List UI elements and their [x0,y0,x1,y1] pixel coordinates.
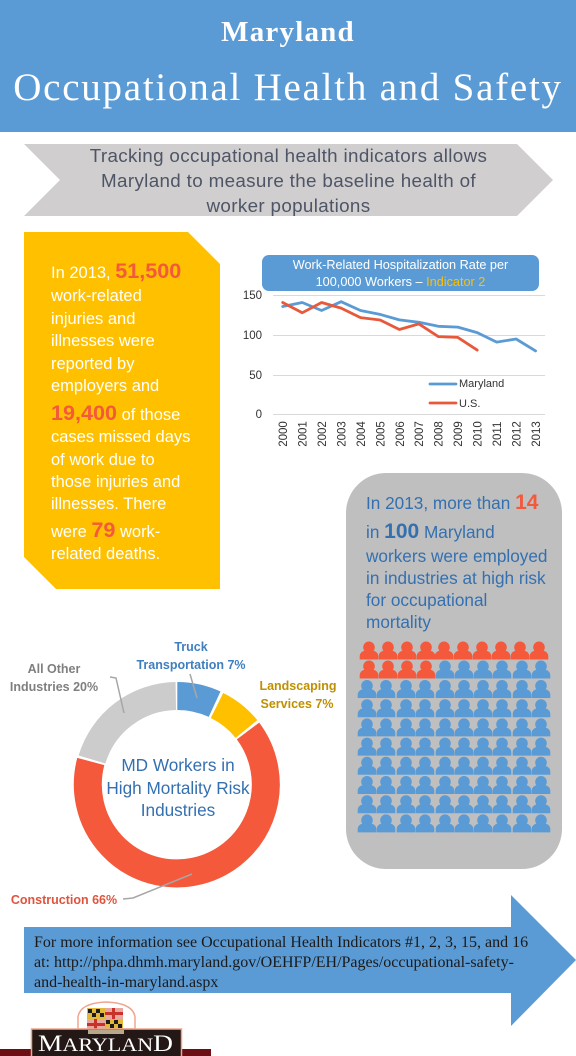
intro text: Tracking occupational health indicators allows [90,145,487,166]
x axis labels: 2003 [336,421,348,447]
y axis labels: 100 [243,330,262,342]
donut centre label [106,755,250,820]
x axis labels: 2011 [492,422,504,446]
x axis labels: 2008 [434,421,446,447]
donut chart: industries [10,640,337,907]
donut centre label: High Mortality Risk [106,778,250,798]
Maryland flag [87,1008,123,1030]
statistics text: illnesses. There [51,495,166,513]
label: truck transportation: Transportation 7% [136,658,246,672]
x axis labels: 2000 [278,421,290,447]
header band [0,0,576,132]
high-risk text: workers were employed [366,546,548,566]
x axis labels: 2009 [453,421,465,447]
label: landscaping services: Services 7% [261,697,333,711]
intro chevron banner [24,144,553,216]
legend: Maryland [459,378,504,390]
intro text: Maryland to measure the baseline health of [101,170,476,191]
statistics text: injuries and [51,310,135,328]
blue figures [358,660,550,832]
label: all other industries: All Other [28,662,81,676]
intro text: worker populations [207,195,370,216]
label: truck transportation [136,640,246,672]
logo wordmark: MARYLAN D [38,1031,173,1056]
label: landscaping services: Landscaping [259,679,337,693]
y axis labels: 150 [243,290,262,302]
segment: landscaping services [217,706,246,729]
x axis labels: 2002 [317,421,329,447]
red figures [360,642,548,678]
more information text [34,934,528,991]
statistics text: those injuries and [51,473,180,491]
chart title box: Work-Related Hospitalization Rate per [293,258,508,272]
statistics text: employers and [51,377,159,395]
statistics text: work-related [51,287,142,305]
statistics text: illnesses were [51,332,155,350]
x axis labels: 2007 [414,421,426,447]
footer arrow [24,895,576,1026]
x axis labels [278,421,543,447]
x axis labels: 2012 [512,421,524,447]
x axis labels: 2010 [473,421,485,447]
chart title box: 100,000 Workers – Indicator 2 [316,275,485,289]
chart title box [262,255,539,291]
intro text [90,145,487,216]
donut centre label: MD Workers in [121,755,235,775]
donut centre label: Industries [141,800,215,820]
statistics text: reported by [51,355,134,373]
high-risk text: In 2013, more than 14 [366,491,538,514]
footer arrow: For more information see Occupational Health Indicators #1, 2, 3, 15, and 16 [34,934,528,951]
panel: high-risk workers [346,473,562,869]
label: all other industries [10,662,98,694]
label: truck transportation: Truck [174,640,208,654]
x axis labels: 2005 [375,421,387,447]
high-risk text: mortality [366,612,431,632]
segment: truck transportation [177,696,215,704]
y axis labels [243,290,262,421]
y axis labels: 0 [256,409,262,421]
statistics text: were 79 work- [51,517,160,542]
legend [430,378,504,410]
x axis labels: 2006 [395,421,407,447]
high-risk text: in industries at high risk [366,568,546,588]
statistics text: related deaths. [51,545,160,563]
statistics text: 19,400 of those [51,400,180,425]
U.S. series line [283,302,477,350]
line chart: hospitalization rate [243,290,545,447]
statistics text: cases missed days [51,428,190,446]
statistics text: In 2013, 51,500 [51,258,181,283]
segment: construction [88,731,266,873]
x axis labels: 2004 [356,421,368,447]
label: landscaping services [259,679,337,711]
x axis labels: 2001 [298,421,310,447]
label: all other industries: Industries 20% [10,680,98,694]
Maryland series line [283,302,536,351]
logo: Maryland [0,1001,211,1056]
high-risk text: in 100 Maryland [366,520,495,543]
leader lines [110,674,197,899]
statistics text: of work due to [51,451,155,469]
y axis labels: 50 [249,370,262,382]
statistics text [51,258,190,563]
panel: 2013 injury statistics [24,232,220,589]
x axis labels: 2013 [531,421,543,447]
title: Maryland: Maryland [221,16,355,48]
pictogram: 14 of 100 workers [358,642,550,832]
high-risk text [366,491,548,632]
footer arrow: and-health-in-maryland.aspx [34,974,218,991]
label: construction: Construction 66% [11,893,117,907]
title: Occupational Health and Safety: Occupational Health and Safety [13,66,563,109]
footer arrow: at: http://phpa.dhmh.maryland.gov/OEHFP/EH/Pages/occupational-safety- [34,954,514,971]
segment: all other industries [92,696,176,760]
high-risk text: for occupational [366,590,487,610]
legend: U.S. [459,398,480,410]
